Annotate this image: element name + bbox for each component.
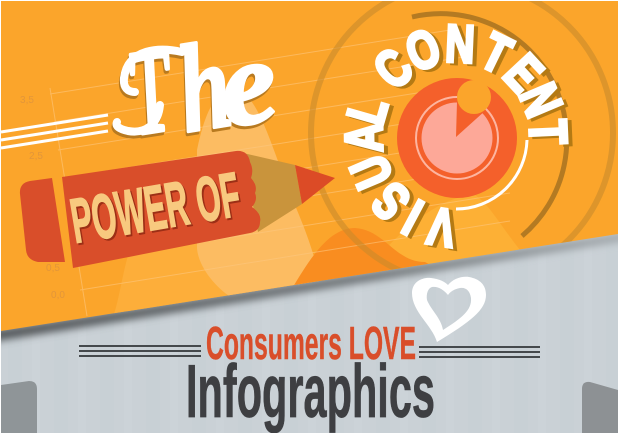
letter shadows: T [522, 120, 583, 148]
pencil tip [295, 165, 335, 204]
icon: target dial [397, 14, 567, 236]
letter shadows: S [364, 173, 425, 234]
shadow layer: h [168, 17, 239, 162]
pencil wood [243, 153, 302, 232]
letter shadows: L [339, 92, 403, 133]
icon: pencil [20, 151, 335, 268]
letter shadows: N [512, 77, 578, 127]
triple rule left [79, 345, 201, 357]
chart: axis labels [20, 95, 65, 301]
shadow layer: e [208, 15, 284, 156]
letter shadows: C [366, 39, 428, 102]
chart: grid lines [50, 30, 510, 316]
dark arc [412, 14, 567, 236]
face layer: e [209, 12, 285, 153]
panel: right grey card [582, 382, 618, 433]
pencil label: POWER OF [66, 160, 247, 259]
chart: axis labels: 2,5 [29, 151, 43, 162]
speed lines [1, 115, 108, 148]
panel: left grey card [1, 381, 37, 433]
letter faces: N [444, 13, 476, 74]
white arc [456, 140, 527, 209]
pink disc [422, 102, 492, 174]
letter faces: I [394, 189, 431, 247]
face layer: h [169, 14, 240, 159]
letter faces: U [338, 147, 404, 197]
letter faces: T [518, 118, 579, 146]
red disc [397, 78, 517, 198]
chart: axis labels: 0,0 [51, 290, 65, 301]
chart: axis labels: 3,5 [20, 95, 34, 106]
title word: The [115, 12, 285, 163]
icon: heart [412, 277, 486, 342]
letter faces: L [335, 90, 399, 131]
orange knob [457, 80, 491, 114]
heading: Consumers LOVE: Consumers LOVE [206, 317, 416, 369]
face layer [116, 12, 285, 160]
outer ring [311, 0, 613, 284]
pointer [456, 102, 486, 137]
letter shadows [337, 15, 583, 261]
pencil eraser [20, 178, 65, 262]
letter faces: E [493, 43, 555, 103]
letter faces: T [472, 21, 521, 85]
letter shadows: E [497, 45, 559, 105]
letter faces: N [508, 75, 574, 125]
letter shadows: U [342, 149, 408, 199]
triple rule right [419, 346, 540, 358]
letter faces [333, 13, 579, 259]
curved title: VISUAL CONTENT [333, 13, 583, 261]
letter shadows: N [448, 15, 480, 76]
letter faces: A [333, 123, 394, 153]
letter faces: V [423, 196, 459, 259]
ring [416, 97, 498, 179]
chart: background distribution shapes [114, 102, 519, 314]
chart: axis labels: 0,5 [46, 263, 60, 274]
letter shadows: T [476, 23, 525, 87]
letter shadows: I [398, 191, 435, 249]
letter faces: C [362, 37, 424, 100]
shadow layer: T [118, 26, 183, 163]
shadow layer [115, 15, 284, 163]
letter faces: O [398, 16, 448, 83]
letter shadows: A [337, 125, 398, 155]
letter shadows: V [427, 198, 463, 261]
letter faces: S [360, 171, 421, 232]
face layer: T [119, 23, 184, 160]
pencil body [62, 151, 260, 268]
pencil label: POWER OF: POWER OF [68, 161, 247, 259]
panel: orange banner [1, 0, 618, 331]
panel: grey lower background [0, 220, 620, 433]
pencil label: POWER OF: POWER OF [66, 160, 245, 257]
letter shadows: O [402, 18, 452, 85]
